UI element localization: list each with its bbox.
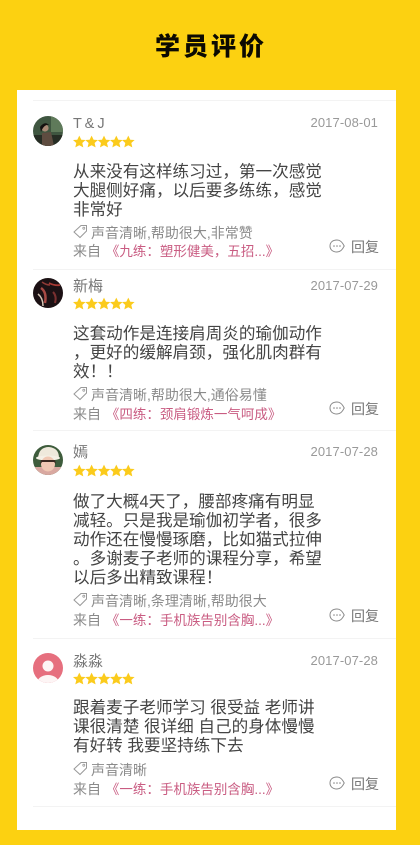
tags: 声音清晰 — [91, 762, 147, 778]
reviewer name: 淼淼 — [73, 653, 103, 670]
star rating — [73, 136, 134, 148]
review text: 以后多出精致课程！ — [73, 568, 222, 587]
review text: 跟着麦子老师学习 很受益 老师讲 — [73, 698, 315, 717]
review text — [73, 492, 322, 587]
review text: 动作还在慢慢琢磨，比如猫式拉伸 — [73, 530, 322, 549]
review text: 减轻。只是我是瑜伽初学者，很多 — [73, 511, 322, 530]
review date: 2017-07-29 — [310, 278, 378, 293]
star rating — [73, 298, 134, 310]
source course: 来自 《四练：颈肩锻炼一气呵成》 — [73, 406, 281, 422]
review text: 。多谢麦子老师的课程分享，希望 — [73, 549, 322, 568]
review text: 大腿侧好痛，以后要多练练，感觉 — [73, 181, 322, 200]
reviewer name: 嫣 — [73, 444, 88, 461]
icon: reply bubble — [330, 608, 345, 622]
review text: 效！！ — [73, 362, 123, 381]
reply label: 回复 — [351, 608, 379, 624]
review card: 淼淼 — [33, 653, 379, 797]
review card: 新梅 — [33, 278, 379, 422]
reply label: 回复 — [351, 239, 379, 255]
icon: tag — [73, 225, 87, 238]
review text: 做了大概4天了，腰部疼痛有明显 — [73, 492, 315, 511]
reply label: 回复 — [351, 401, 379, 417]
review date: 2017-07-28 — [310, 653, 378, 668]
reviewer name: T & J — [73, 116, 105, 132]
review text: 从来没有这样练习过，第一次感觉 — [73, 162, 322, 181]
tags: 声音清晰,帮助很大,非常赞 — [91, 225, 253, 241]
review date: 2017-08-01 — [310, 115, 378, 130]
source course: 来自 《一练：手机族告别含胸...》 — [73, 612, 279, 628]
review text — [73, 698, 315, 755]
source course: 来自 《一练：手机族告别含胸...》 — [73, 781, 279, 797]
icon: tag — [73, 762, 87, 776]
icon: reply bubble — [330, 776, 345, 790]
reply label: 回复 — [351, 776, 379, 792]
review text: 这套动作是连接肩周炎的瑜伽动作 — [73, 324, 322, 343]
reviewer name: 新梅 — [73, 278, 103, 295]
review text: 课很清楚 很详细 自己的身体慢慢 — [73, 717, 315, 736]
icon: reply bubble — [330, 402, 345, 414]
review date: 2017-07-28 — [310, 444, 378, 459]
icon: avatar — [33, 116, 63, 146]
star rating — [73, 672, 134, 684]
icon: reply bubble — [330, 240, 345, 252]
star rating — [73, 464, 134, 476]
review card: T & J — [33, 115, 379, 259]
panel: reviews — [17, 90, 396, 830]
icon: tag — [73, 593, 87, 606]
review text: 非常好 — [73, 200, 123, 219]
icon: avatar — [33, 278, 63, 308]
review text — [73, 162, 322, 219]
icon: avatar — [33, 653, 63, 683]
source course: 来自 《九练：塑形健美，五招...》 — [73, 243, 279, 259]
title: 学员评价 — [155, 33, 267, 61]
tags: 声音清晰,帮助很大,通俗易懂 — [91, 387, 267, 403]
icon: avatar — [33, 445, 63, 475]
review text: 有好转 我要坚持练下去 — [73, 736, 244, 755]
review card: 嫣 — [33, 444, 379, 628]
review text: ，更好的缓解肩颈，强化肌肉群有 — [73, 343, 322, 362]
tags: 声音清晰,条理清晰,帮助很大 — [91, 593, 267, 609]
icon: tag — [73, 387, 87, 400]
review text — [73, 324, 322, 381]
